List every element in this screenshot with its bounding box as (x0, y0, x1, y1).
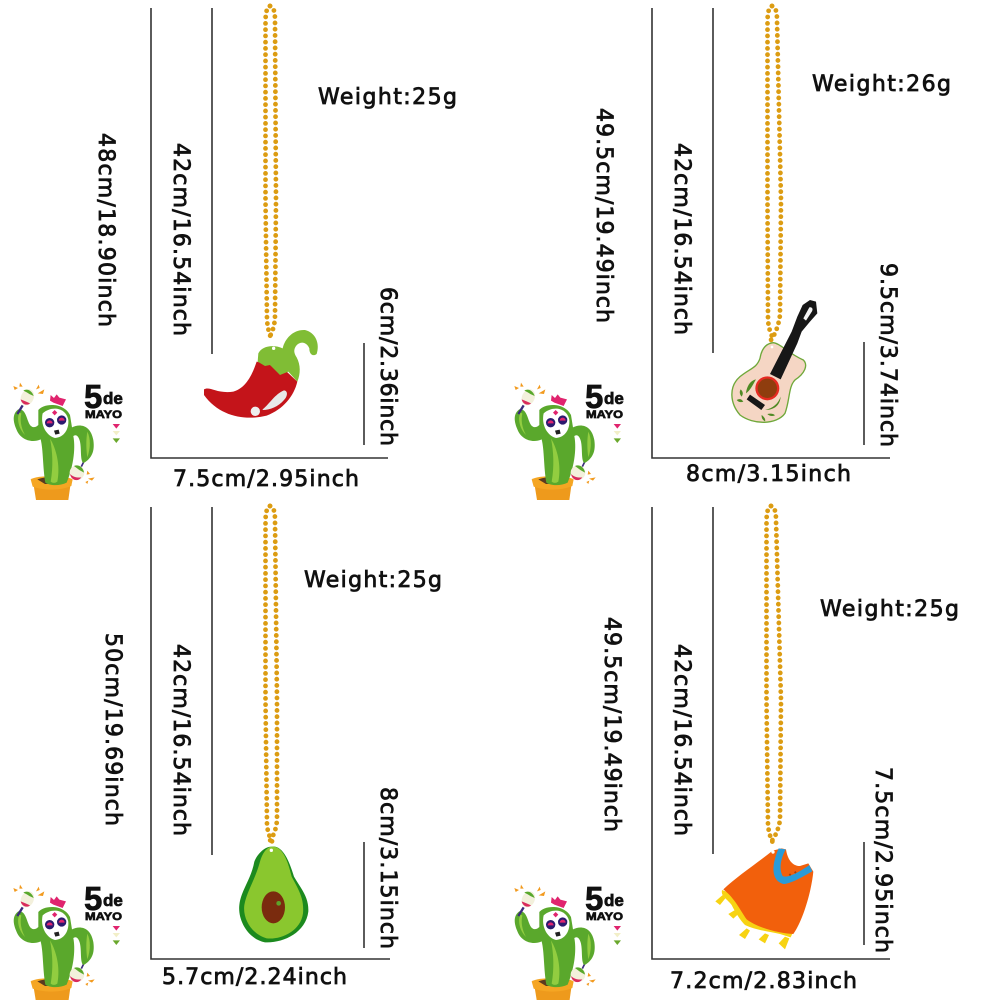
pendant: avocado (239, 847, 308, 942)
dimension lines: chili (151, 8, 388, 458)
label: width: 8cm/3.15inch (686, 462, 851, 487)
panel: chili pendant (13, 6, 457, 500)
dimension lines: avocado (151, 507, 390, 959)
logo: 5 de Mayo cactus: MAYO (586, 911, 624, 923)
label: chain length: 42cm/16.54inch (669, 143, 694, 335)
label: pendant height: 6cm/2.36inch (375, 287, 400, 446)
panel: avocado pendant (13, 506, 442, 1000)
label: chain length: 42cm/16.54inch (669, 644, 694, 836)
logo: 5 de Mayo cactus: 5 (585, 880, 603, 917)
logo: 5 de Mayo cactus: de (604, 389, 624, 408)
label: pendant height: 7.5cm/2.95inch (870, 767, 895, 953)
label: height total: 49.5cm/19.49inch (591, 108, 616, 323)
label: width: 7.5cm/2.95inch (173, 467, 359, 492)
logo: 5 de Mayo cactus (514, 880, 624, 1000)
bead chain: poncho (766, 506, 781, 843)
logo: 5 de Mayo cactus: MAYO (85, 409, 123, 421)
logo: 5 de Mayo cactus: 5 (585, 378, 603, 415)
label: pendant height: 8cm/3.15inch (375, 787, 400, 949)
pendant: chili pepper (204, 330, 318, 418)
logo: 5 de Mayo cactus: de (103, 891, 123, 910)
panel: guitar pendant (514, 6, 951, 500)
label: chain length: 42cm/16.54inch (168, 644, 193, 836)
label: weight: Weight:26g (812, 72, 951, 97)
dimension lines: poncho (652, 507, 890, 959)
label: height total: 49.5cm/19.49inch (599, 617, 624, 832)
pendant: guitar (732, 300, 817, 422)
logo: 5 de Mayo cactus: de (604, 891, 624, 910)
pendant: poncho (715, 848, 813, 949)
label: chain length: 42cm/16.54inch (168, 143, 193, 336)
label: weight: Weight:25g (820, 597, 959, 622)
label: width: 7.2cm/2.83inch (670, 969, 857, 994)
logo: 5 de Mayo cactus (13, 880, 123, 1000)
logo: 5 de Mayo cactus: de (103, 389, 123, 408)
bead chain: avocado (266, 506, 277, 843)
logo: 5 de Mayo cactus: MAYO (85, 911, 123, 923)
bead chain: guitar (768, 6, 781, 340)
label: weight: Weight:25g (304, 568, 442, 593)
label: width: 5.7cm/2.24inch (162, 965, 347, 990)
label: weight: Weight:25g (318, 85, 457, 110)
dimension lines: guitar (652, 8, 890, 458)
label: pendant height: 9.5cm/3.74inch (875, 263, 900, 447)
logo: 5 de Mayo cactus (13, 378, 123, 500)
logo: 5 de Mayo cactus: 5 (84, 378, 102, 415)
logo: 5 de Mayo cactus: 5 (84, 880, 102, 917)
label: height total: 48cm/18.90inch (93, 133, 118, 327)
bead chain: chili (266, 6, 276, 340)
label: height total: 50cm/19.69inch (100, 633, 125, 826)
logo: 5 de Mayo cactus: MAYO (586, 409, 624, 421)
logo: 5 de Mayo cactus (514, 378, 624, 500)
panel: poncho pendant (514, 506, 959, 1000)
